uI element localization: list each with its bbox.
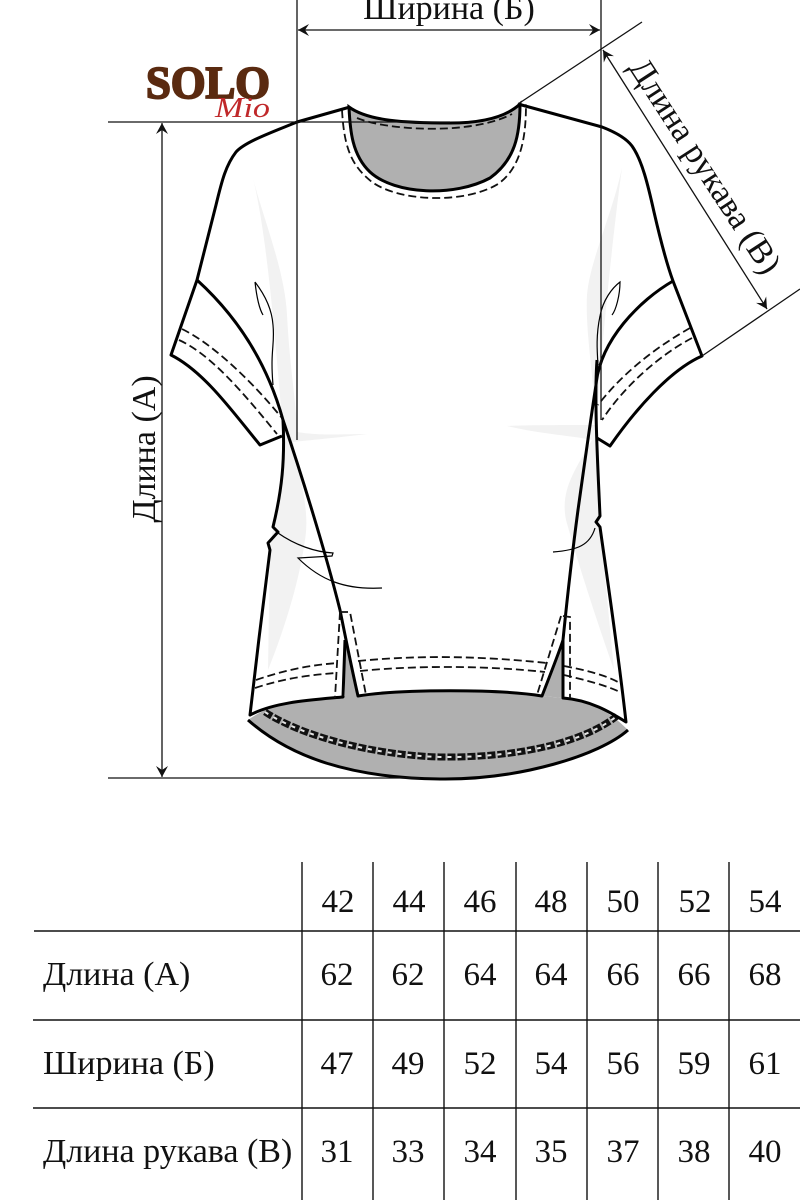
row: sizes: 52 (678, 884, 712, 920)
row: sizes: 46 (464, 884, 496, 920)
row: length (43, 956, 782, 993)
neck stitching (342, 104, 526, 198)
garment illustration: t-shirt (171, 104, 702, 779)
row: length: 62 (392, 957, 424, 993)
row: sizes: 50 (606, 884, 640, 920)
hem zigzag stitching (265, 712, 617, 757)
row: sleeve length: 37 (606, 1134, 640, 1170)
row: length: 64 (464, 957, 496, 993)
label: sleeve length: Длина рукава (В) (621, 52, 788, 281)
dimension: length (А) (108, 122, 450, 778)
row: sleeve length (43, 1133, 782, 1170)
row: width: 61 (748, 1046, 782, 1082)
wrinkles (255, 282, 620, 588)
row: sleeve length: 34 (464, 1134, 496, 1170)
dimension: width (Б) (297, 0, 601, 440)
row: length: 64 (534, 957, 568, 993)
shirt outline (171, 104, 702, 722)
row: width: 59 (678, 1046, 710, 1082)
row: length: 66 (678, 957, 710, 993)
row: sizes (322, 884, 782, 920)
logo: SOLO (146, 58, 270, 108)
row: sleeve length: 38 (678, 1134, 710, 1170)
row: width: Ширина (Б) (43, 1045, 215, 1082)
row: length: 62 (320, 957, 354, 993)
row: width: 47 (320, 1046, 354, 1082)
slit gussets (345, 640, 563, 698)
label: length: Длина (А) (126, 375, 163, 523)
neck opening (349, 104, 520, 191)
row: width: 56 (606, 1046, 640, 1082)
row: sleeve length: 35 (534, 1134, 568, 1170)
logo: Mio (214, 92, 270, 124)
row: sleeve length: 31 (320, 1134, 354, 1170)
row: width (43, 1045, 782, 1082)
row: sleeve length: 33 (392, 1134, 424, 1170)
row: length: Длина (А) (43, 956, 190, 993)
size table (33, 862, 800, 1200)
row: sleeve length: Длина рукава (В) (43, 1133, 292, 1170)
row: sizes: 54 (748, 884, 782, 920)
hem opening (248, 691, 628, 779)
row: width: 52 (464, 1046, 496, 1082)
fabric shading (253, 168, 622, 670)
row: width: 49 (392, 1046, 424, 1082)
row: width: 54 (534, 1046, 568, 1082)
sleeve and hem stitching (179, 328, 692, 698)
row: sleeve length: 40 (748, 1134, 782, 1170)
row: sizes: 42 (322, 884, 354, 920)
dimension: sleeve length (В) (518, 22, 800, 356)
row: sizes: 48 (534, 884, 568, 920)
row: length: 68 (748, 957, 782, 993)
row: sizes: 44 (392, 884, 426, 920)
row: length: 66 (606, 957, 640, 993)
table grid (33, 862, 800, 1200)
